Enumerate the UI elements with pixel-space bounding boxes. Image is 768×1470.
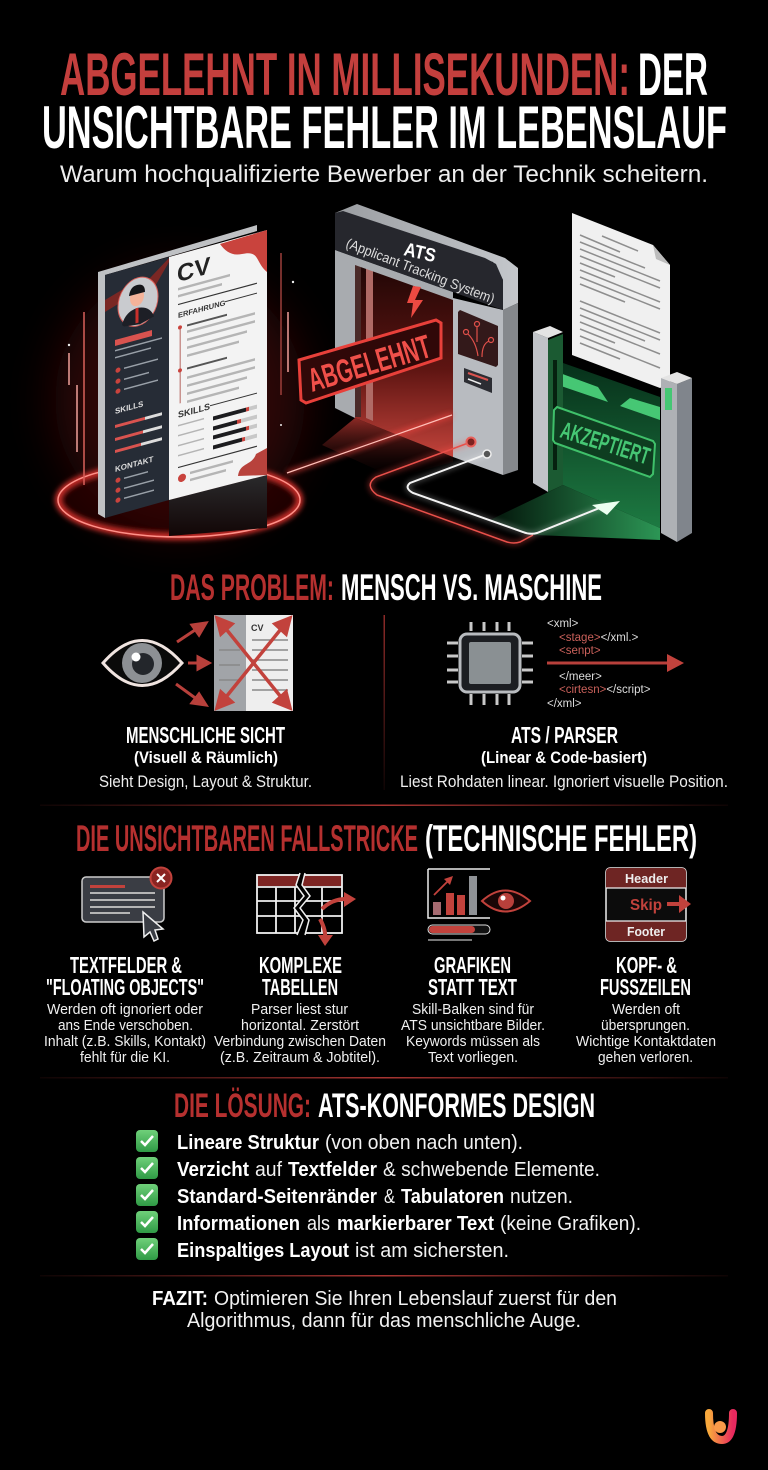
panel: Grafiken statt Text: Text vorliegen. xyxy=(428,1049,518,1066)
panel: Grafiken statt Text: STATT TEXT xyxy=(428,974,517,1000)
icon: chart with eye and skill bar xyxy=(428,869,530,941)
panel: komplexe Tabellen: horizontal. Zerstört xyxy=(241,1017,360,1034)
"Akzeptiert" sign xyxy=(553,407,655,477)
conclusion: FAZIT: xyxy=(152,1288,208,1310)
item 3: & xyxy=(384,1186,396,1208)
glowing circle under CV xyxy=(58,463,300,537)
right column content: CV xyxy=(177,252,211,288)
heading: das Problem xyxy=(170,567,602,608)
reflection below CV xyxy=(169,475,267,536)
label: ATS / Parser: ATS / PARSER xyxy=(511,722,618,748)
panel: komplexe Tabellen: TABELLEN xyxy=(262,974,338,1000)
circuit panel xyxy=(458,310,498,367)
"Akzeptiert" sign: AKZEPTIERT xyxy=(557,417,653,470)
code snippet: </meer> xyxy=(559,671,602,683)
gate left pillar xyxy=(335,250,355,418)
panel: ATS parser: (Linear & Code-basiert) xyxy=(481,748,647,767)
panel: Textfelder: Inhalt (z.B. Skills, Kontakt) xyxy=(44,1033,206,1050)
panel: komplexe Tabellen xyxy=(214,873,386,1066)
conclusion: Optimieren Sie Ihren Lebenslauf zuerst für den xyxy=(214,1288,617,1310)
panel: Grafiken statt Text: Keywords müssen als xyxy=(406,1033,540,1050)
conclusion: Algorithmus, dann für das menschliche Auge. xyxy=(187,1310,581,1332)
panel: komplexe Tabellen: Parser liest stur xyxy=(251,1001,348,1018)
checklist xyxy=(136,1130,641,1262)
panel: Kopf- und Fusszeilen: Wichtige Kontaktdaten xyxy=(576,1033,716,1050)
panel: Grafiken statt Text: ATS unsichtbare Bilder. xyxy=(401,1017,545,1034)
icon: header skip footer: Skip xyxy=(630,897,662,914)
CV document: ERFAHRUNG xyxy=(178,298,226,320)
ATS gate xyxy=(322,204,518,478)
label: Grafiken statt Text: GRAFIKEN xyxy=(434,952,511,978)
red ambient glow xyxy=(55,270,305,530)
code snippet: <xml> xyxy=(547,618,579,630)
item 4: (keine Grafiken). xyxy=(500,1213,641,1235)
item 5: ist am sichersten. xyxy=(355,1240,509,1262)
panel: Grafiken statt Text xyxy=(401,869,545,1066)
code snippet: <senpt> xyxy=(559,645,601,657)
"Abgelehnt" sign: ABGELEHNT xyxy=(303,327,435,399)
check icons xyxy=(136,1130,158,1260)
item 2 xyxy=(177,1159,600,1181)
panel: Kopf- und Fusszeilen xyxy=(576,868,716,1066)
icon: broken table xyxy=(257,873,356,946)
item 2: Verzicht xyxy=(177,1159,249,1181)
hero illustration: CV passing through ATS gate xyxy=(55,204,692,543)
CV document: SKILLS xyxy=(115,399,144,416)
item 1 xyxy=(177,1132,523,1154)
code snippet: <cirtesn></script> xyxy=(559,684,651,696)
item 4 xyxy=(177,1213,641,1235)
panel: Grafiken statt Text: Skill-Balken sind für xyxy=(412,1001,534,1018)
icon: header skip footer: Footer xyxy=(627,924,665,939)
title xyxy=(42,41,727,161)
panel: human view: (Visuell & Räumlich) xyxy=(134,748,278,767)
code snippet: <stage></xml.> xyxy=(559,632,639,644)
panel: human view: Sieht Design, Layout & Struktur. xyxy=(99,772,312,791)
panel: komplexe Tabellen: (z.B. Zeitraum & Jobtitel). xyxy=(220,1049,380,1066)
item 2: & schwebende Elemente. xyxy=(383,1159,600,1181)
subtitle: Warum hochqualifizierte Bewerber an der Technik scheitern. xyxy=(60,161,708,188)
red rejected path xyxy=(287,415,533,543)
icon: brand logo xyxy=(709,1413,733,1440)
code snippet xyxy=(547,618,651,710)
panel: Textfelder: ans Ende verschoben. xyxy=(58,1017,193,1034)
panel: Kopf- und Fusszeilen: FUSSZEILEN xyxy=(600,974,691,1000)
white accepted path with arrow xyxy=(408,450,620,534)
item 2: Textfelder xyxy=(288,1159,377,1181)
small status panel xyxy=(464,368,492,393)
CV document: KONTAKT xyxy=(115,455,153,474)
lightning bolt xyxy=(407,286,423,318)
title: DER xyxy=(638,41,708,108)
icon: header skip footer xyxy=(606,868,691,941)
portrait xyxy=(118,272,158,331)
item 2: auf xyxy=(255,1159,282,1181)
panel: ATS parser xyxy=(400,618,728,791)
panel: Kopf- und Fusszeilen: übersprungen. xyxy=(601,1017,690,1034)
heading: die Lösung: DIE LÖSUNG: xyxy=(174,1087,311,1125)
item 3: nutzen. xyxy=(510,1186,573,1208)
label: Textfelder: TEXTFELDER & xyxy=(70,952,182,978)
item 5: Einspaltiges Layout xyxy=(177,1240,349,1262)
gate right pillar xyxy=(453,298,503,475)
ATS header panel xyxy=(335,211,503,310)
speed streaks xyxy=(68,253,294,485)
icon: header skip footer: Header xyxy=(625,871,668,886)
panel: Kopf- und Fusszeilen: Werden oft xyxy=(612,1001,681,1018)
paper document xyxy=(572,213,670,388)
green accept gate xyxy=(490,213,692,542)
label: menschliche Sicht: MENSCHLICHE SICHT xyxy=(126,722,285,748)
panel: Textfelder: fehlt für die KI. xyxy=(80,1049,170,1066)
item 1: Lineare Struktur xyxy=(177,1132,319,1154)
arrow: linear reading xyxy=(547,654,684,672)
item 4: als xyxy=(307,1213,330,1235)
conclusion xyxy=(152,1288,617,1332)
"Abgelehnt" sign xyxy=(299,320,441,403)
label: komplexe Tabellen: KOMPLEXE xyxy=(259,952,342,978)
heading: das Problem: DAS PROBLEM: xyxy=(170,567,334,608)
item 3 xyxy=(177,1186,573,1208)
heading: die Lösung xyxy=(174,1087,595,1125)
icon: CV with crossed arrows xyxy=(214,615,293,711)
item 4: Informationen xyxy=(177,1213,300,1235)
item 5 xyxy=(177,1240,509,1262)
panel: Textfelder: Werden oft ignoriert oder xyxy=(47,1001,203,1018)
item 3: Standard-Seitenränder xyxy=(177,1186,377,1208)
left column content xyxy=(115,330,152,346)
icon: floating text box xyxy=(82,868,172,941)
panel: ATS parser: Liest Rohdaten linear. Ignoriert visuelle Position. xyxy=(400,772,728,791)
heading: die Lösung: ATS-KONFORMES DESIGN xyxy=(318,1087,595,1125)
ATS header panel: ATS xyxy=(402,239,438,267)
panel: Textfelder xyxy=(44,868,206,1066)
CV document xyxy=(98,225,267,536)
CV document: SKILLS xyxy=(178,401,210,420)
icon: eye xyxy=(103,640,182,686)
item 3: Tabulatoren xyxy=(401,1186,504,1208)
panel: human view xyxy=(99,615,312,791)
arrows from eye to CV xyxy=(176,623,209,705)
panel: Kopf- und Fusszeilen: gehen verloren. xyxy=(598,1049,693,1066)
panel: Textfelder: "FLOATING OBJECTS" xyxy=(46,974,204,1000)
icon: CV with crossed arrows: CV xyxy=(251,623,264,633)
label: Kopf- und Fusszeilen: KOPF- & xyxy=(616,952,677,978)
heading: das Problem: MENSCH VS. MASCHINE xyxy=(341,567,602,608)
code snippet: </xml> xyxy=(547,698,582,710)
item 1: (von oben nach unten). xyxy=(325,1132,523,1154)
item 4: markierbarer Text xyxy=(337,1213,494,1235)
ATS header panel: (Applicant Tracking System) xyxy=(344,235,497,306)
panel: komplexe Tabellen: Verbindung zwischen Daten xyxy=(214,1033,386,1050)
icon: chip xyxy=(447,622,533,705)
heading: Fallstricke: DIE UNSICHTBAREN FALLSTRICKE xyxy=(76,818,418,859)
